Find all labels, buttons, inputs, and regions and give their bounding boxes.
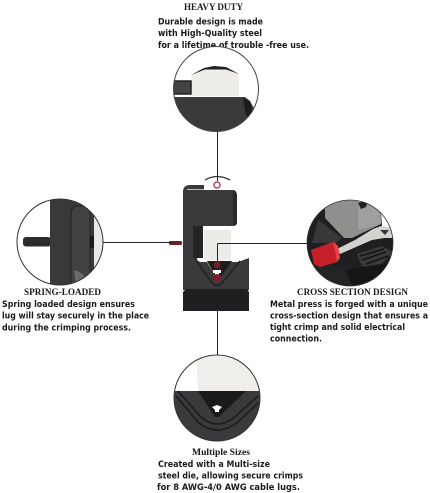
top arc marker [205,176,230,180]
circle detail: lug in die [307,200,396,286]
tool die dark triangle [207,261,232,281]
description: Durable design is made [158,18,263,28]
tool die groove [196,260,240,286]
description: lug will stay securely in the place [2,312,149,322]
description [270,300,428,344]
description: Spring loaded design ensures [2,300,135,310]
description [2,300,149,334]
description: during the crimping process. [2,324,131,334]
upper die red ring [213,261,221,269]
description: for 8 AWG-4/0 AWG cable lugs. [157,483,300,493]
heading: Multiple Sizes [192,448,250,458]
description: tight crimp and solid electrical [270,323,405,333]
description: for a lifetime of trouble -free use. [158,41,309,51]
panel: cross section design [270,200,428,344]
lower die red ring [213,274,221,282]
tool throat shadow [193,226,203,258]
heading: HEAVY DUTY [184,3,243,13]
description [157,460,303,493]
top red marker [214,182,220,188]
circle detail: die top [173,46,259,132]
description [158,18,309,51]
description: Created with a Multi-size [158,460,270,470]
panel: spring-loaded [2,199,149,334]
connector lines [103,132,307,355]
tool base [183,289,249,311]
circle detail: multi-size die [174,355,260,441]
circle detail: spring pin [17,199,103,285]
panel: multiple sizes [157,355,303,493]
central crimper tool [169,176,249,311]
tool lip highlight [187,188,204,190]
lug pale background [204,230,231,260]
heading: SPRING-LOADED [24,288,101,298]
left red pin [169,241,182,245]
description: connection. [270,334,322,344]
description: with High-Quality steel [158,29,262,39]
panel: heavy duty [158,3,309,136]
die white notch [213,270,221,275]
description: steel die, allowing secure crimps [158,472,303,482]
heading: CROSS SECTION DESIGN [297,288,408,298]
tool jaw edge shade [233,190,237,226]
tool upper jaw and body [183,185,237,290]
tool lower die body [183,240,249,290]
